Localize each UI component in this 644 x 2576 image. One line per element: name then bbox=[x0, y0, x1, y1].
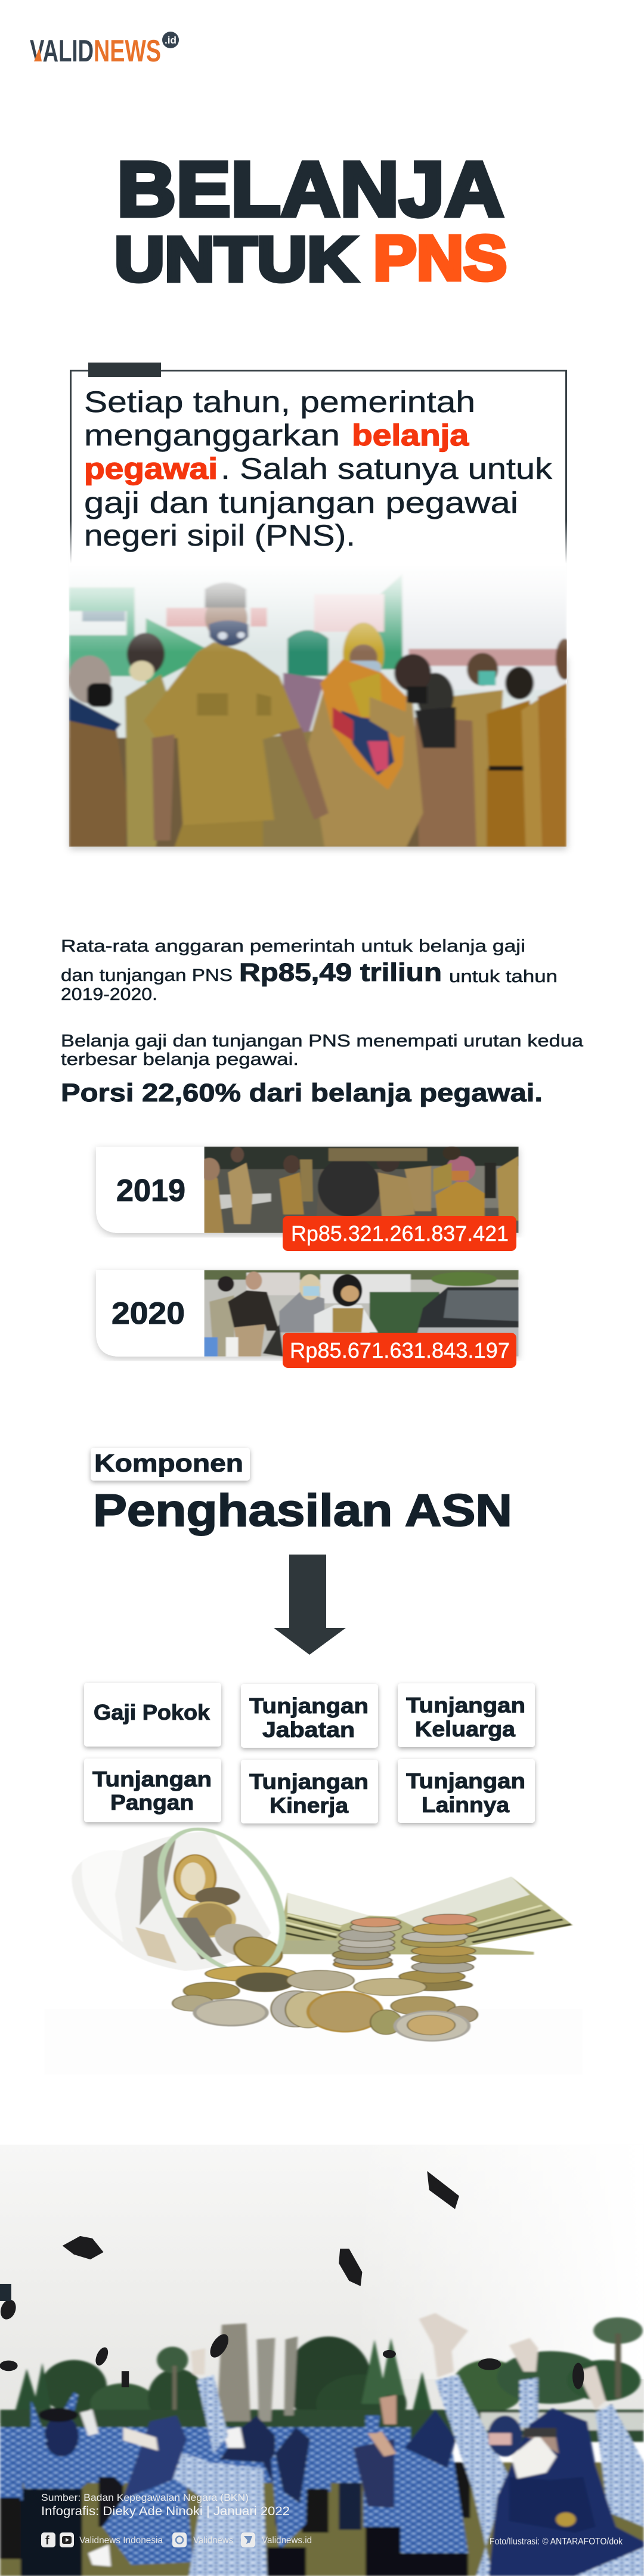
box: Tunjangan Keluarga: Keluarga bbox=[415, 1717, 516, 1741]
heading: Komponen Penghasilan ASN bbox=[91, 1448, 512, 1536]
intro text: negeri sipil (PNS). bbox=[84, 519, 355, 552]
text block: average budget: 2019-2020. bbox=[61, 985, 157, 1004]
ground bbox=[0, 2462, 644, 2576]
text block: average budget: Rata-rata anggaran pemerintah untuk belanja gaji bbox=[61, 937, 525, 956]
box: Tunjangan Kinerja: Tunjangan bbox=[249, 1769, 369, 1794]
box: Tunjangan Keluarga: Tunjangan bbox=[406, 1693, 525, 1717]
box: Tunjangan Lainnya bbox=[398, 1759, 535, 1823]
flying caps bbox=[0, 2171, 584, 2389]
panel: intro with photo bbox=[68, 363, 574, 847]
label: Validnews Indonesia: Validnews Indonesia bbox=[79, 2535, 163, 2546]
title: PNS bbox=[373, 223, 507, 293]
box: Tunjangan Pangan: Pangan bbox=[110, 1790, 194, 1815]
value: Rp85.671.631.843.197 bbox=[290, 1338, 510, 1363]
card: 2020 bbox=[96, 1270, 519, 1368]
box: Tunjangan Kinerja bbox=[241, 1760, 378, 1823]
text block: second largest bbox=[61, 1032, 584, 1107]
source credits: Sumber: Badan Kepegawaian Negara (BKN) bbox=[41, 2492, 249, 2503]
coins in jar bbox=[172, 1855, 290, 1970]
jar rim bbox=[140, 1825, 304, 1976]
coin pile bbox=[172, 1966, 478, 2041]
year label: 2019 bbox=[116, 1174, 185, 1208]
coin stack left bbox=[333, 1918, 401, 1970]
icon: facebook bbox=[41, 2532, 55, 2547]
woman center bbox=[308, 686, 423, 847]
tab accent bbox=[88, 363, 161, 377]
photo: officials 2020 bbox=[204, 1270, 519, 1357]
coin stack right bbox=[398, 1914, 478, 1991]
title: UNTUK bbox=[114, 224, 357, 295]
social links bbox=[41, 2532, 312, 2547]
trees bbox=[0, 2317, 644, 2442]
text block: average budget: Rp85,49 triliun bbox=[239, 958, 442, 987]
logo: Validnews.id: .id bbox=[165, 35, 177, 46]
woman left bbox=[69, 721, 128, 847]
box: Tunjangan Pangan bbox=[84, 1758, 221, 1822]
central figure bbox=[88, 2348, 310, 2576]
box: Tunjangan Kinerja: Kinerja bbox=[270, 1793, 349, 1818]
logo: Validnews.id bbox=[30, 32, 179, 69]
label: Validnews.id: Validnews.id bbox=[262, 2535, 312, 2546]
photo: civil servants throwing caps bbox=[0, 2145, 644, 2576]
climbing wall bbox=[217, 2323, 250, 2422]
value pill bbox=[283, 1216, 516, 1251]
text block: second largest: terbesar belanja pegawai. bbox=[61, 1050, 299, 1069]
intro text: belanja bbox=[352, 419, 469, 452]
box: Tunjangan Lainnya: Lainnya bbox=[422, 1792, 510, 1817]
icon: youtube bbox=[60, 2532, 74, 2547]
label: Validnews: Validnews bbox=[193, 2535, 233, 2546]
intro text: . Salah satunya untuk bbox=[221, 452, 553, 485]
logo: Validnews.id: NEWS bbox=[94, 34, 161, 69]
box: Tunjangan Jabatan bbox=[241, 1684, 378, 1748]
frame line bbox=[70, 371, 566, 564]
text block: second largest: Porsi 22,60% dari belanja pegawai. bbox=[61, 1079, 543, 1107]
source credits bbox=[41, 2492, 290, 2518]
center man bbox=[175, 820, 263, 847]
intro text bbox=[84, 385, 553, 552]
box: Gaji Pokok bbox=[84, 1683, 221, 1747]
value pill bbox=[283, 1333, 516, 1368]
box: Gaji Pokok: Gaji Pokok bbox=[94, 1700, 210, 1724]
box: Tunjangan Jabatan: Tunjangan bbox=[249, 1693, 369, 1718]
source credits: Infografis: Dieky Ade Ninoki | Januari 2022 bbox=[41, 2504, 290, 2518]
card: 2019 bbox=[96, 1146, 519, 1251]
heading: Komponen Penghasilan ASN: Penghasilan ASN bbox=[93, 1485, 512, 1536]
banknotes bbox=[279, 1877, 573, 1955]
arrow bbox=[274, 1555, 346, 1655]
right group bbox=[448, 690, 503, 847]
box: Tunjangan Keluarga bbox=[398, 1683, 535, 1747]
title: BELANJA bbox=[117, 145, 504, 233]
box: Tunjangan Pangan: Tunjangan bbox=[92, 1767, 212, 1791]
logo: Validnews.id: VALID bbox=[30, 34, 94, 69]
back crowd bbox=[0, 2428, 470, 2532]
center-right figure bbox=[353, 2395, 468, 2576]
left figures bbox=[0, 2392, 135, 2576]
text block: average budget: dan tunjangan PNS bbox=[61, 966, 233, 985]
title bbox=[114, 145, 507, 295]
intro text: gaji dan tunjangan pegawai bbox=[84, 486, 518, 519]
intro text: Setiap tahun, pemerintah bbox=[84, 385, 475, 419]
intro text: menganggarkan bbox=[84, 419, 340, 452]
value: Rp85.321.261.837.421 bbox=[291, 1221, 509, 1246]
photo: civil servants in uniform bbox=[68, 553, 574, 847]
heading: Komponen Penghasilan ASN: Komponen bbox=[94, 1449, 243, 1477]
year label: 2020 bbox=[112, 1296, 185, 1331]
box: Tunjangan Lainnya: Tunjangan bbox=[406, 1769, 525, 1793]
box: Tunjangan Jabatan: Jabatan bbox=[262, 1717, 355, 1742]
text block: average budget bbox=[61, 937, 558, 1004]
right figures bbox=[419, 2313, 644, 2576]
icon: twitter bbox=[241, 2532, 255, 2547]
photo shadow bbox=[70, 656, 567, 847]
dark accent block bbox=[0, 2284, 11, 2301]
man behind bbox=[125, 674, 172, 847]
photo credit: Foto/Ilustrasi: © ANTARAFOTO/dok bbox=[490, 2537, 623, 2547]
glass jar bbox=[72, 1832, 271, 1971]
illustration: coin jar and money bbox=[44, 1825, 583, 2075]
photo: officials 2019 bbox=[199, 1146, 519, 1233]
text block: average budget: untuk tahun bbox=[449, 967, 558, 986]
icon: facebook: f bbox=[45, 2534, 49, 2547]
intro text: pegawai bbox=[84, 452, 218, 485]
text block: second largest: Belanja gaji dan tunjangan PNS menempati urutan kedua bbox=[61, 1032, 584, 1051]
icon: instagram bbox=[172, 2532, 187, 2547]
